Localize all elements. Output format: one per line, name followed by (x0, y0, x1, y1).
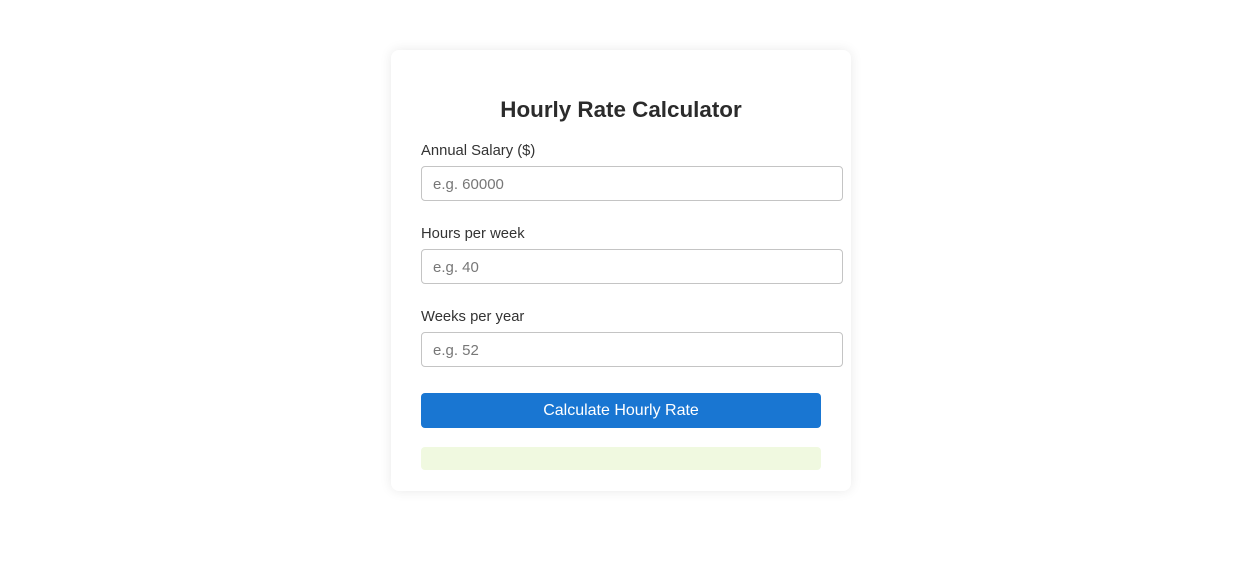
title: Hourly Rate Calculator (500, 97, 742, 122)
input: hours per week: e.g. 40 (433, 259, 479, 276)
input: hours per week (421, 249, 843, 284)
button: calculate: Calculate Hourly Rate (543, 402, 699, 419)
panel: calculator card (391, 50, 851, 491)
input: annual salary (421, 166, 843, 201)
input: weeks per year (421, 332, 843, 367)
input: annual salary: e.g. 60000 (433, 176, 504, 193)
label: hours per week: Hours per week (421, 226, 525, 242)
button: calculate (421, 393, 821, 428)
label: weeks per year: Weeks per year (421, 309, 524, 325)
label: annual salary: Annual Salary ($) (421, 143, 535, 159)
result box (421, 447, 821, 470)
input: weeks per year: e.g. 52 (433, 342, 479, 359)
